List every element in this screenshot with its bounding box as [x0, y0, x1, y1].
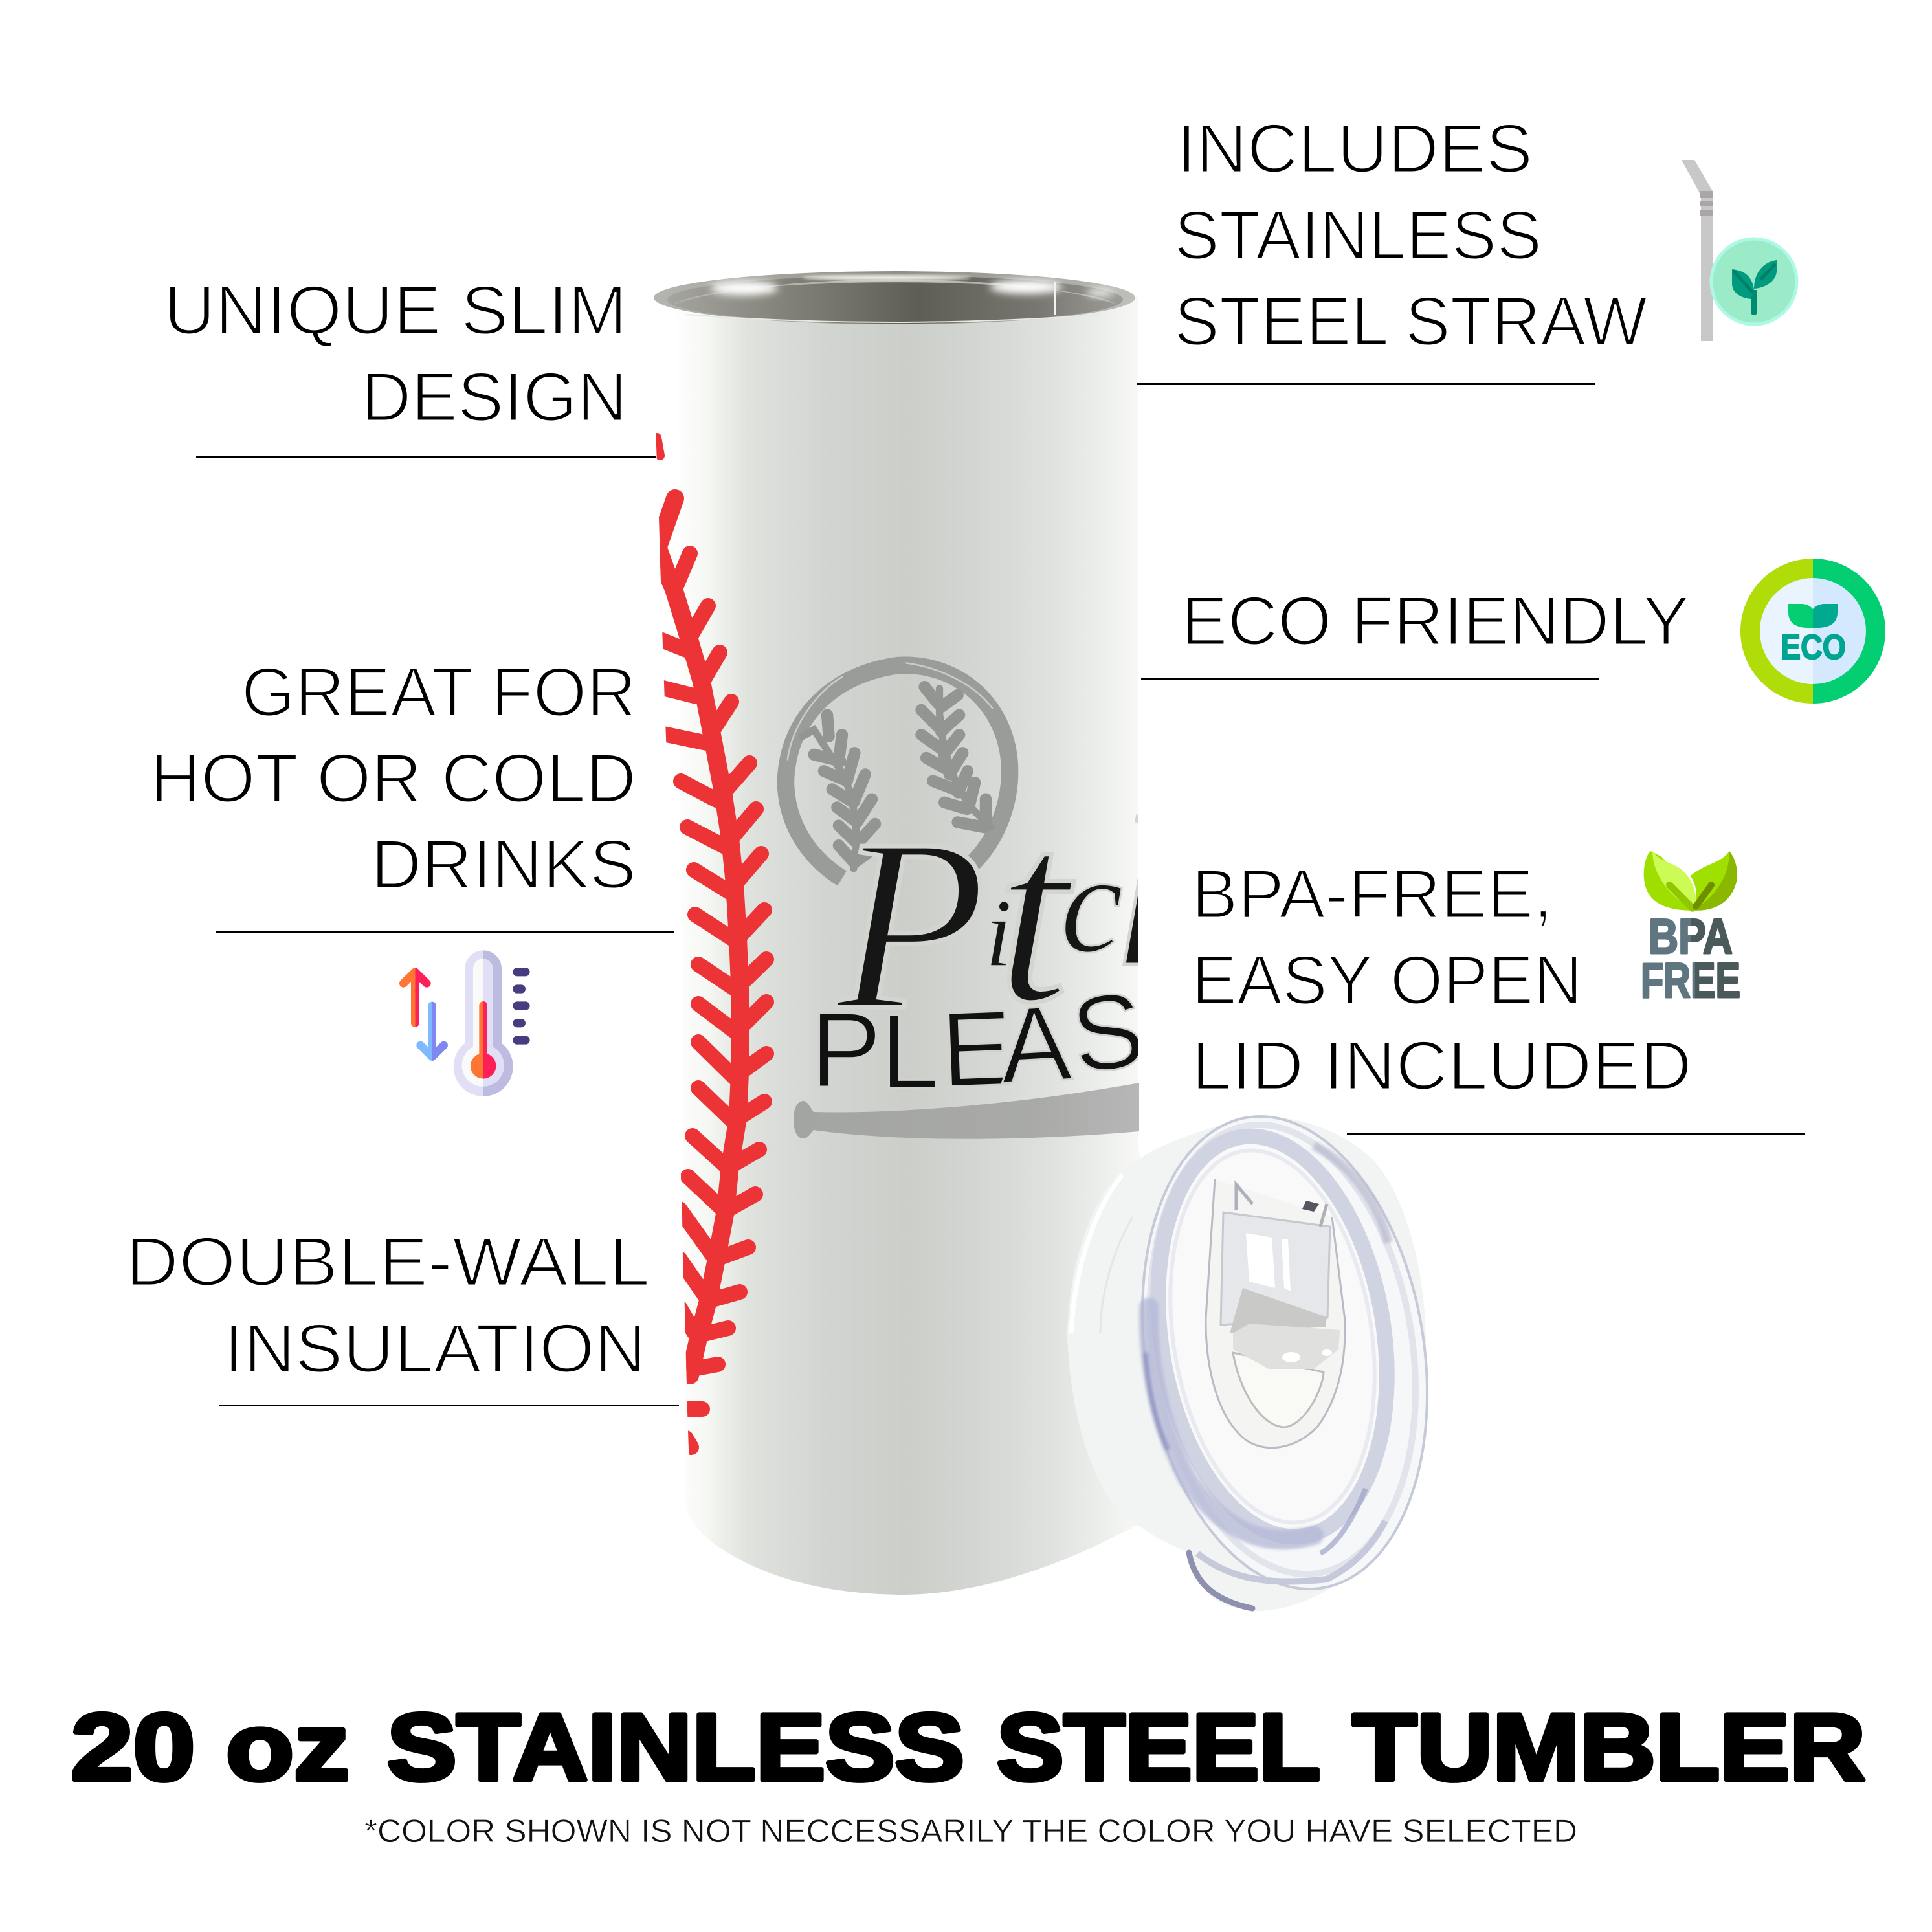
icon: thermometer — [403, 950, 530, 1096]
word PLEASE: PLEASE — [810, 959, 1223, 1111]
callout: bpa-free lid: EASY OPEN — [1192, 941, 1582, 1019]
script word Pitch: c — [1060, 825, 1124, 983]
icon: bpa free: BPA — [1649, 909, 1733, 964]
callout: unique slim design: DESIGN — [361, 358, 627, 436]
callout: unique slim design: UNIQUE SLIM — [164, 271, 627, 349]
callout: stainless steel straw — [1137, 109, 1647, 385]
callout: stainless steel straw: STEEL STRAW — [1174, 282, 1647, 360]
baseball stitching — [657, 438, 766, 1447]
icon: eco badge: ECO — [1781, 628, 1846, 667]
callout: hot or cold: GREAT FOR — [241, 653, 636, 731]
callout: bpa-free lid — [1192, 855, 1805, 1135]
icon: bpa free: FREE — [1641, 953, 1740, 1008]
callout: double-wall insulation: INSULATION — [224, 1309, 646, 1387]
callout: double-wall insulation — [126, 1223, 679, 1406]
title — [71, 1694, 1865, 1801]
tumbler lid — [1067, 1096, 1460, 1611]
script word Pitch: P — [832, 788, 986, 1061]
lid front rim — [1110, 1096, 1460, 1610]
callout: hot or cold: DRINKS — [371, 825, 636, 903]
callout: stainless steel straw: INCLUDES — [1177, 109, 1533, 187]
bat graphic — [794, 1083, 1139, 1139]
callout: hot or cold: HOT OR COLD — [150, 739, 636, 817]
script word Pitch: i — [985, 880, 1012, 987]
title: 20 oz — [71, 1694, 350, 1801]
lid inner ring — [1131, 1120, 1414, 1553]
title: STEEL — [997, 1694, 1320, 1801]
lid sleeve — [1067, 1117, 1426, 1611]
tumbler rim — [654, 271, 1135, 324]
lid spout — [1189, 1553, 1252, 1608]
callout: hot or cold — [150, 653, 674, 933]
icon: bpa free — [1641, 851, 1740, 1008]
lid latch — [1221, 1184, 1340, 1369]
callout: eco friendly: ECO FRIENDLY — [1181, 582, 1689, 660]
lid drink slot — [1206, 1179, 1345, 1448]
title: TUMBLER — [1353, 1694, 1865, 1801]
icon: eco badge — [1740, 559, 1885, 704]
callout: stainless steel straw: STAINLESS — [1174, 196, 1542, 274]
lid highlight — [1071, 1175, 1122, 1333]
bpa leaves — [1644, 851, 1737, 911]
footnote: *COLOR SHOWN IS NOT NECCESSARILY THE COLOR YOU HAVE SELECTED — [364, 1813, 1577, 1849]
tumbler — [654, 271, 1139, 1595]
baseball graphic — [786, 663, 1010, 878]
icon: straw with sprout — [1682, 160, 1797, 341]
callout: double-wall insulation: DOUBLE-WALL — [126, 1223, 650, 1300]
callout: bpa-free lid: BPA-FREE, — [1192, 855, 1553, 933]
script word Pitch: t — [997, 770, 1078, 1056]
slogan text — [820, 814, 1138, 1087]
callout: bpa-free lid: LID INCLUDED — [1192, 1027, 1692, 1104]
script word Pitch: h — [1116, 775, 1223, 1011]
tumbler body — [676, 297, 1171, 1595]
title: STAINLESS — [387, 1694, 964, 1801]
callout: unique slim design — [164, 271, 656, 458]
